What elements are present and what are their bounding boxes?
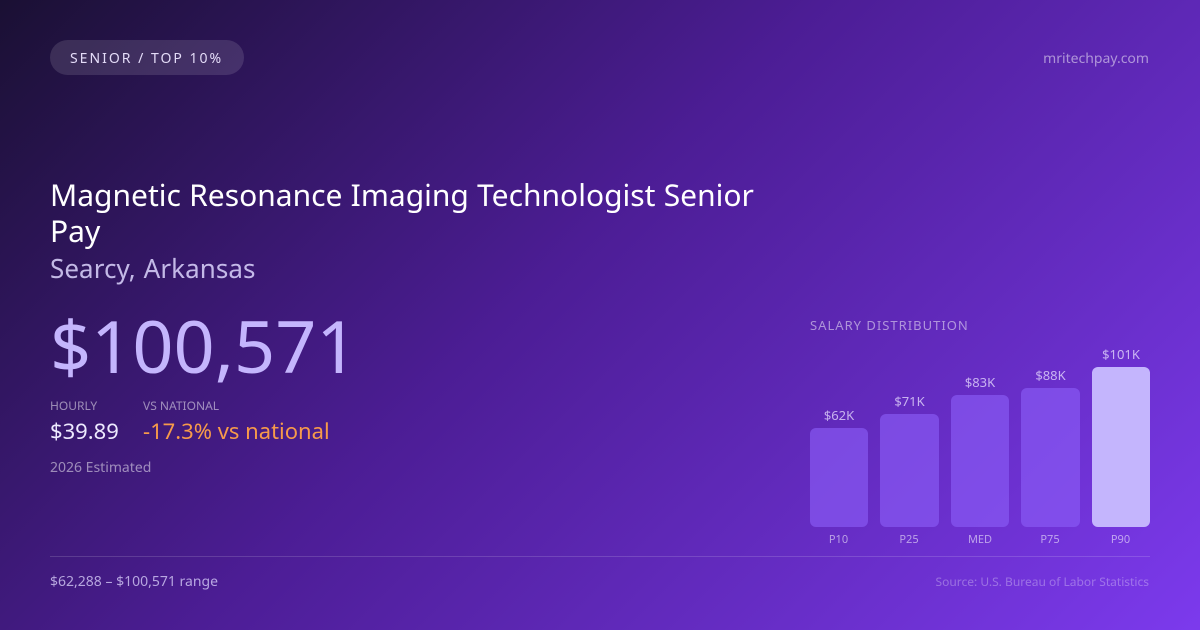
title: Magnetic Resonance Imaging Technologist Senior Pay (50, 174, 754, 251)
site name: mritechpay.com (1043, 49, 1149, 68)
bar P10 (810, 406, 868, 547)
badge: SENIOR / TOP 10% (70, 49, 223, 68)
value: $71K (894, 392, 925, 410)
value: $101K (1102, 345, 1140, 363)
badge (50, 40, 244, 75)
hourly value: $39.89 (50, 416, 119, 446)
axis label: P75 (1040, 532, 1060, 547)
axis label: P90 (1111, 532, 1130, 547)
value: $88K (1035, 366, 1066, 384)
value: $62K (824, 406, 854, 424)
bar (880, 414, 939, 527)
bar (810, 428, 868, 527)
salary range: $62,288 – $100,571 range (50, 572, 218, 591)
national comparison stat (143, 397, 330, 446)
comparison value: -17.3% vs national (143, 416, 330, 446)
axis label: MED (968, 532, 992, 547)
axis label: P25 (899, 532, 919, 547)
salary: $100,571 (50, 297, 358, 395)
chart title: SALARY DISTRIBUTION (810, 316, 969, 334)
comparison label: VS NATIONAL (143, 397, 219, 414)
bar P90 (1092, 345, 1150, 547)
bar P75 (1021, 366, 1080, 547)
estimate note: 2026 Estimated (50, 458, 151, 477)
hourly label: HOURLY (50, 397, 97, 414)
bar (1021, 388, 1080, 527)
axis label: P10 (829, 532, 848, 547)
hourly stat (50, 397, 119, 446)
bar P25 (880, 392, 939, 547)
source: Source: U.S. Bureau of Labor Statistics (936, 573, 1149, 590)
bar median (951, 373, 1009, 547)
bar (1092, 367, 1150, 527)
bar (951, 395, 1009, 527)
location: Searcy, Arkansas (50, 250, 256, 286)
value: $83K (965, 373, 995, 391)
